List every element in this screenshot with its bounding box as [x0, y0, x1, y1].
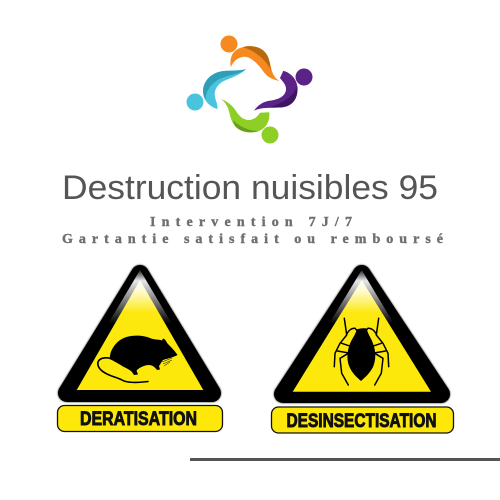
yellow triangle [77, 280, 203, 390]
label: deratisation: DERATISATION [80, 409, 197, 430]
triangle shadow [283, 274, 441, 394]
logo figure: purple [254, 68, 312, 111]
bottom rule [190, 458, 500, 461]
subtitle line 1: Intervention 7J/7 [150, 215, 352, 230]
black triangle frame [283, 274, 441, 394]
label: deratisation [58, 406, 222, 432]
icon: insect [334, 318, 389, 385]
yellow triangle [293, 280, 431, 392]
logo: four people in a circle [186, 36, 312, 144]
subtitle line 2: Gartantie satisfait ou remboursé [62, 232, 443, 247]
label: desinsectisation: DESINSECTISATION [286, 411, 436, 432]
logo figure: green [221, 99, 278, 144]
warning sign: desinsectisation [272, 270, 454, 433]
logo figure: blue [186, 69, 246, 110]
triangle shadow [67, 274, 212, 393]
black triangle frame [67, 274, 212, 393]
label: desinsectisation [272, 407, 454, 433]
icon: rat [98, 336, 178, 382]
title: Destruction nuisibles 95 [62, 169, 438, 207]
warning sign: deratisation [58, 270, 222, 432]
logo figure: orange [220, 36, 279, 81]
frame highlight [329, 270, 394, 324]
frame highlight [108, 270, 172, 324]
